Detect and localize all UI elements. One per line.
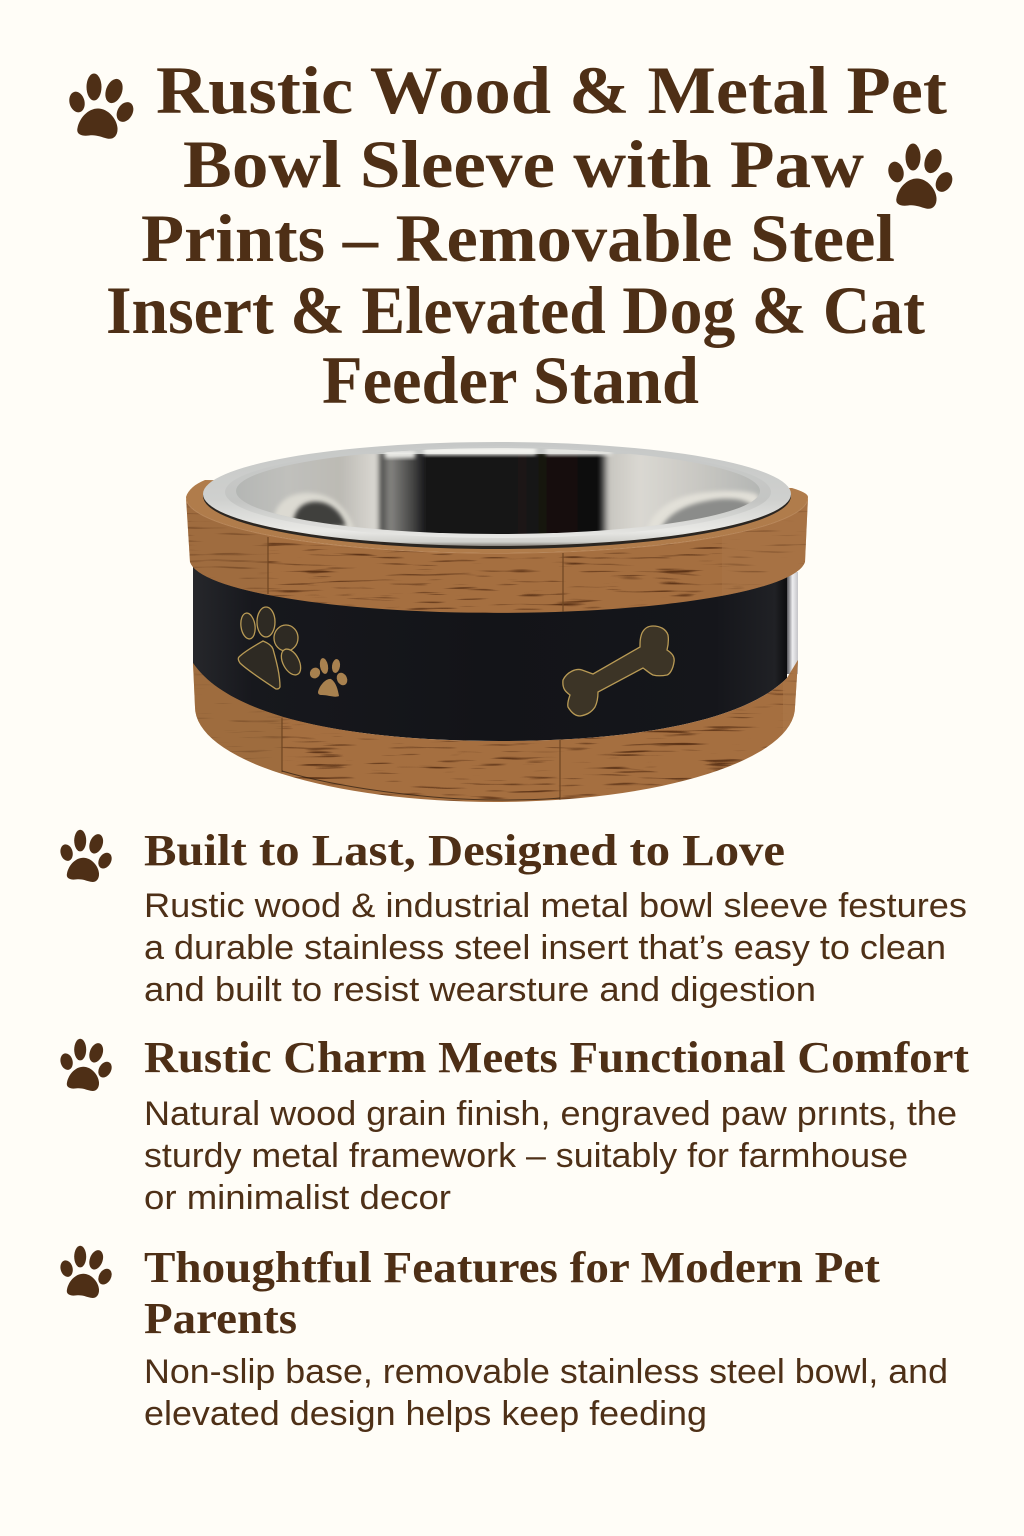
- title: Prints – Removable Steel: [141, 200, 895, 276]
- black metal band: [193, 565, 787, 741]
- lower wood band: [193, 660, 798, 802]
- section 1: built to last: [59, 826, 967, 1009]
- text block 3: elevated design helps keep feeding: [144, 1395, 707, 1433]
- heading 3: Thoughtful Features for Modern Pet: [144, 1243, 880, 1292]
- text block 2: Natural wood grain finish, engraved paw prınts, the: [144, 1095, 957, 1133]
- text block 3: Non-slip base, removable stainless steel bowl, and: [144, 1353, 948, 1391]
- text block 1: Rustic wood & industrial metal bowl sleeve festures: [144, 887, 967, 925]
- upper wood band: [186, 498, 808, 613]
- heading 3: [144, 1243, 880, 1343]
- product image: bowl: [180, 440, 820, 805]
- title: Insert & Elevated Dog & Cat: [106, 272, 925, 348]
- heading 2: Rustic Charm Meets Functional Comfort: [144, 1033, 969, 1082]
- icon: paw bullet 3: [59, 1246, 114, 1298]
- wood top surface: [186, 480, 808, 553]
- title: [106, 52, 947, 418]
- title: Feeder Stand: [322, 342, 699, 418]
- icon: engraved small paw: [308, 657, 349, 697]
- text block 1: a durable stainless steel insert that’s easy to clean: [144, 929, 946, 967]
- title: Rustic Wood & Metal Pet: [156, 52, 947, 128]
- text block 2: [144, 1095, 957, 1217]
- icon: paw bullet 2: [59, 1039, 114, 1091]
- base shadow line: [282, 771, 560, 800]
- section 2: rustic charm: [59, 1033, 969, 1217]
- section 3: thoughtful features: [59, 1243, 948, 1433]
- title: Bowl Sleeve with Paw: [183, 126, 864, 202]
- icon: title paw right: [886, 144, 956, 209]
- icon: engraved bone: [563, 626, 674, 716]
- icon: paw bullet 1: [59, 830, 114, 882]
- text block 1: and built to resist wearsture and digestion: [144, 971, 816, 1009]
- heading 3: Parents: [144, 1294, 297, 1343]
- steel strip: [787, 572, 798, 674]
- text block 2: or minimalist decor: [144, 1179, 451, 1217]
- text block 2: sturdy metal framework – suitably for farmhouse: [144, 1137, 908, 1175]
- steel rim: [203, 442, 791, 549]
- steel bowl interior: [236, 448, 760, 534]
- icon: title paw left: [67, 74, 137, 139]
- heading 1: Built to Last, Designed to Love: [144, 826, 785, 875]
- icon: engraved large paw: [238, 607, 305, 689]
- text block 1: [144, 887, 967, 1009]
- text block 3: [144, 1353, 948, 1433]
